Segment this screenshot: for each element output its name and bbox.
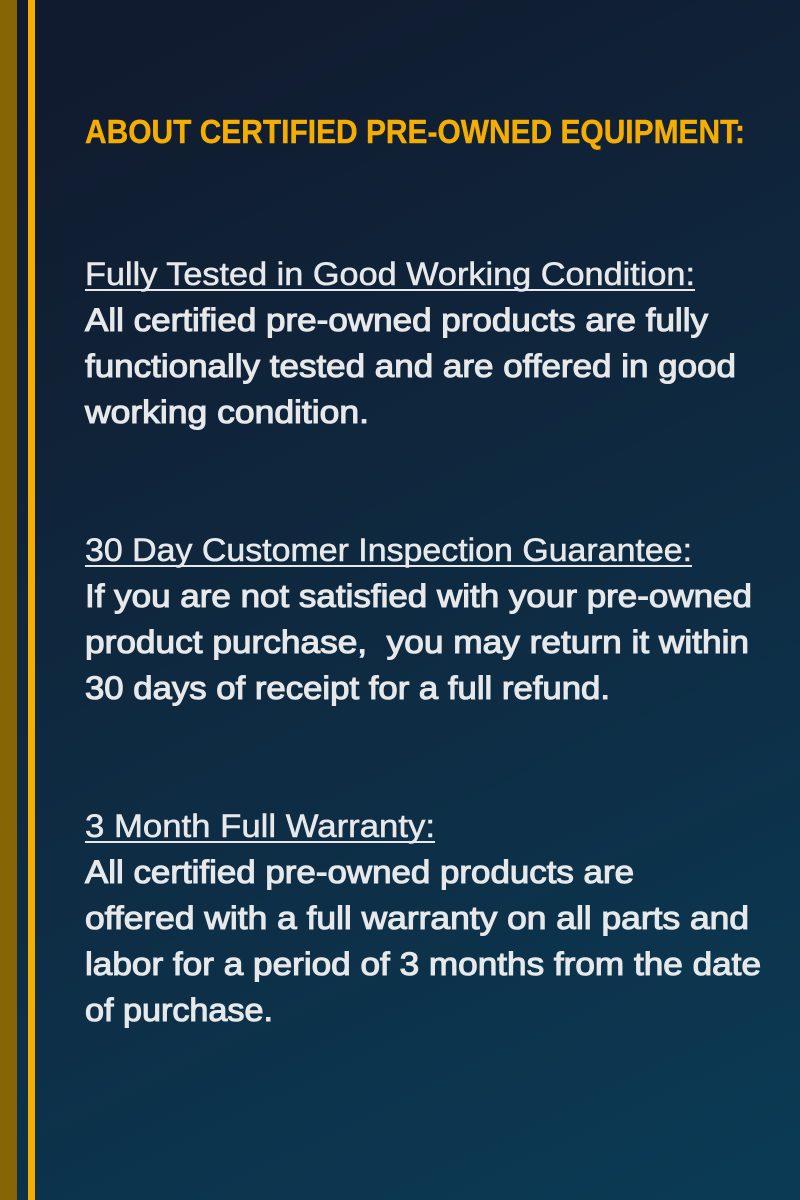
body text: fully tested: All certified pre-owned products are fully: [85, 302, 708, 338]
heading: inspection guarantee: 30 Day Customer Inspection Guarantee:: [85, 532, 692, 568]
body text: warranty: of purchase.: [85, 992, 273, 1028]
heading underline: fully tested: [85, 289, 695, 291]
heading underline: warranty: [85, 841, 435, 843]
section: warranty: [85, 808, 761, 1028]
title: ABOUT CERTIFIED PRE-OWNED EQUIPMENT:: [85, 113, 745, 150]
heading: warranty: 3 Month Full Warranty:: [85, 808, 435, 844]
body text: inspection guarantee: [85, 578, 752, 706]
body text: fully tested: working condition.: [84, 394, 369, 430]
body text: inspection guarantee: 30 days of receipt for a full refund.: [85, 670, 610, 706]
body text: warranty: labor for a period of 3 months from the date: [85, 946, 761, 982]
body text: inspection guarantee: If you are not satisfied with your pre-owned: [85, 578, 752, 614]
body text: fully tested: functionally tested and are offered in good: [85, 348, 736, 384]
section: fully tested: [84, 256, 736, 430]
left dark gold stripe: [0, 0, 17, 1200]
heading: fully tested: Fully Tested in Good Working Condition:: [85, 256, 695, 292]
left bright gold stripe: [28, 0, 35, 1200]
body text: fully tested: [84, 302, 736, 430]
body text: warranty: offered with a full warranty on all parts and: [85, 900, 749, 936]
section: inspection guarantee: [85, 532, 752, 706]
body text: inspection guarantee: product purchase, you may return it within: [85, 624, 749, 660]
body text: warranty: [85, 854, 761, 1028]
heading underline: inspection guarantee: [85, 565, 692, 567]
body text: warranty: All certified pre-owned products are: [85, 854, 634, 890]
